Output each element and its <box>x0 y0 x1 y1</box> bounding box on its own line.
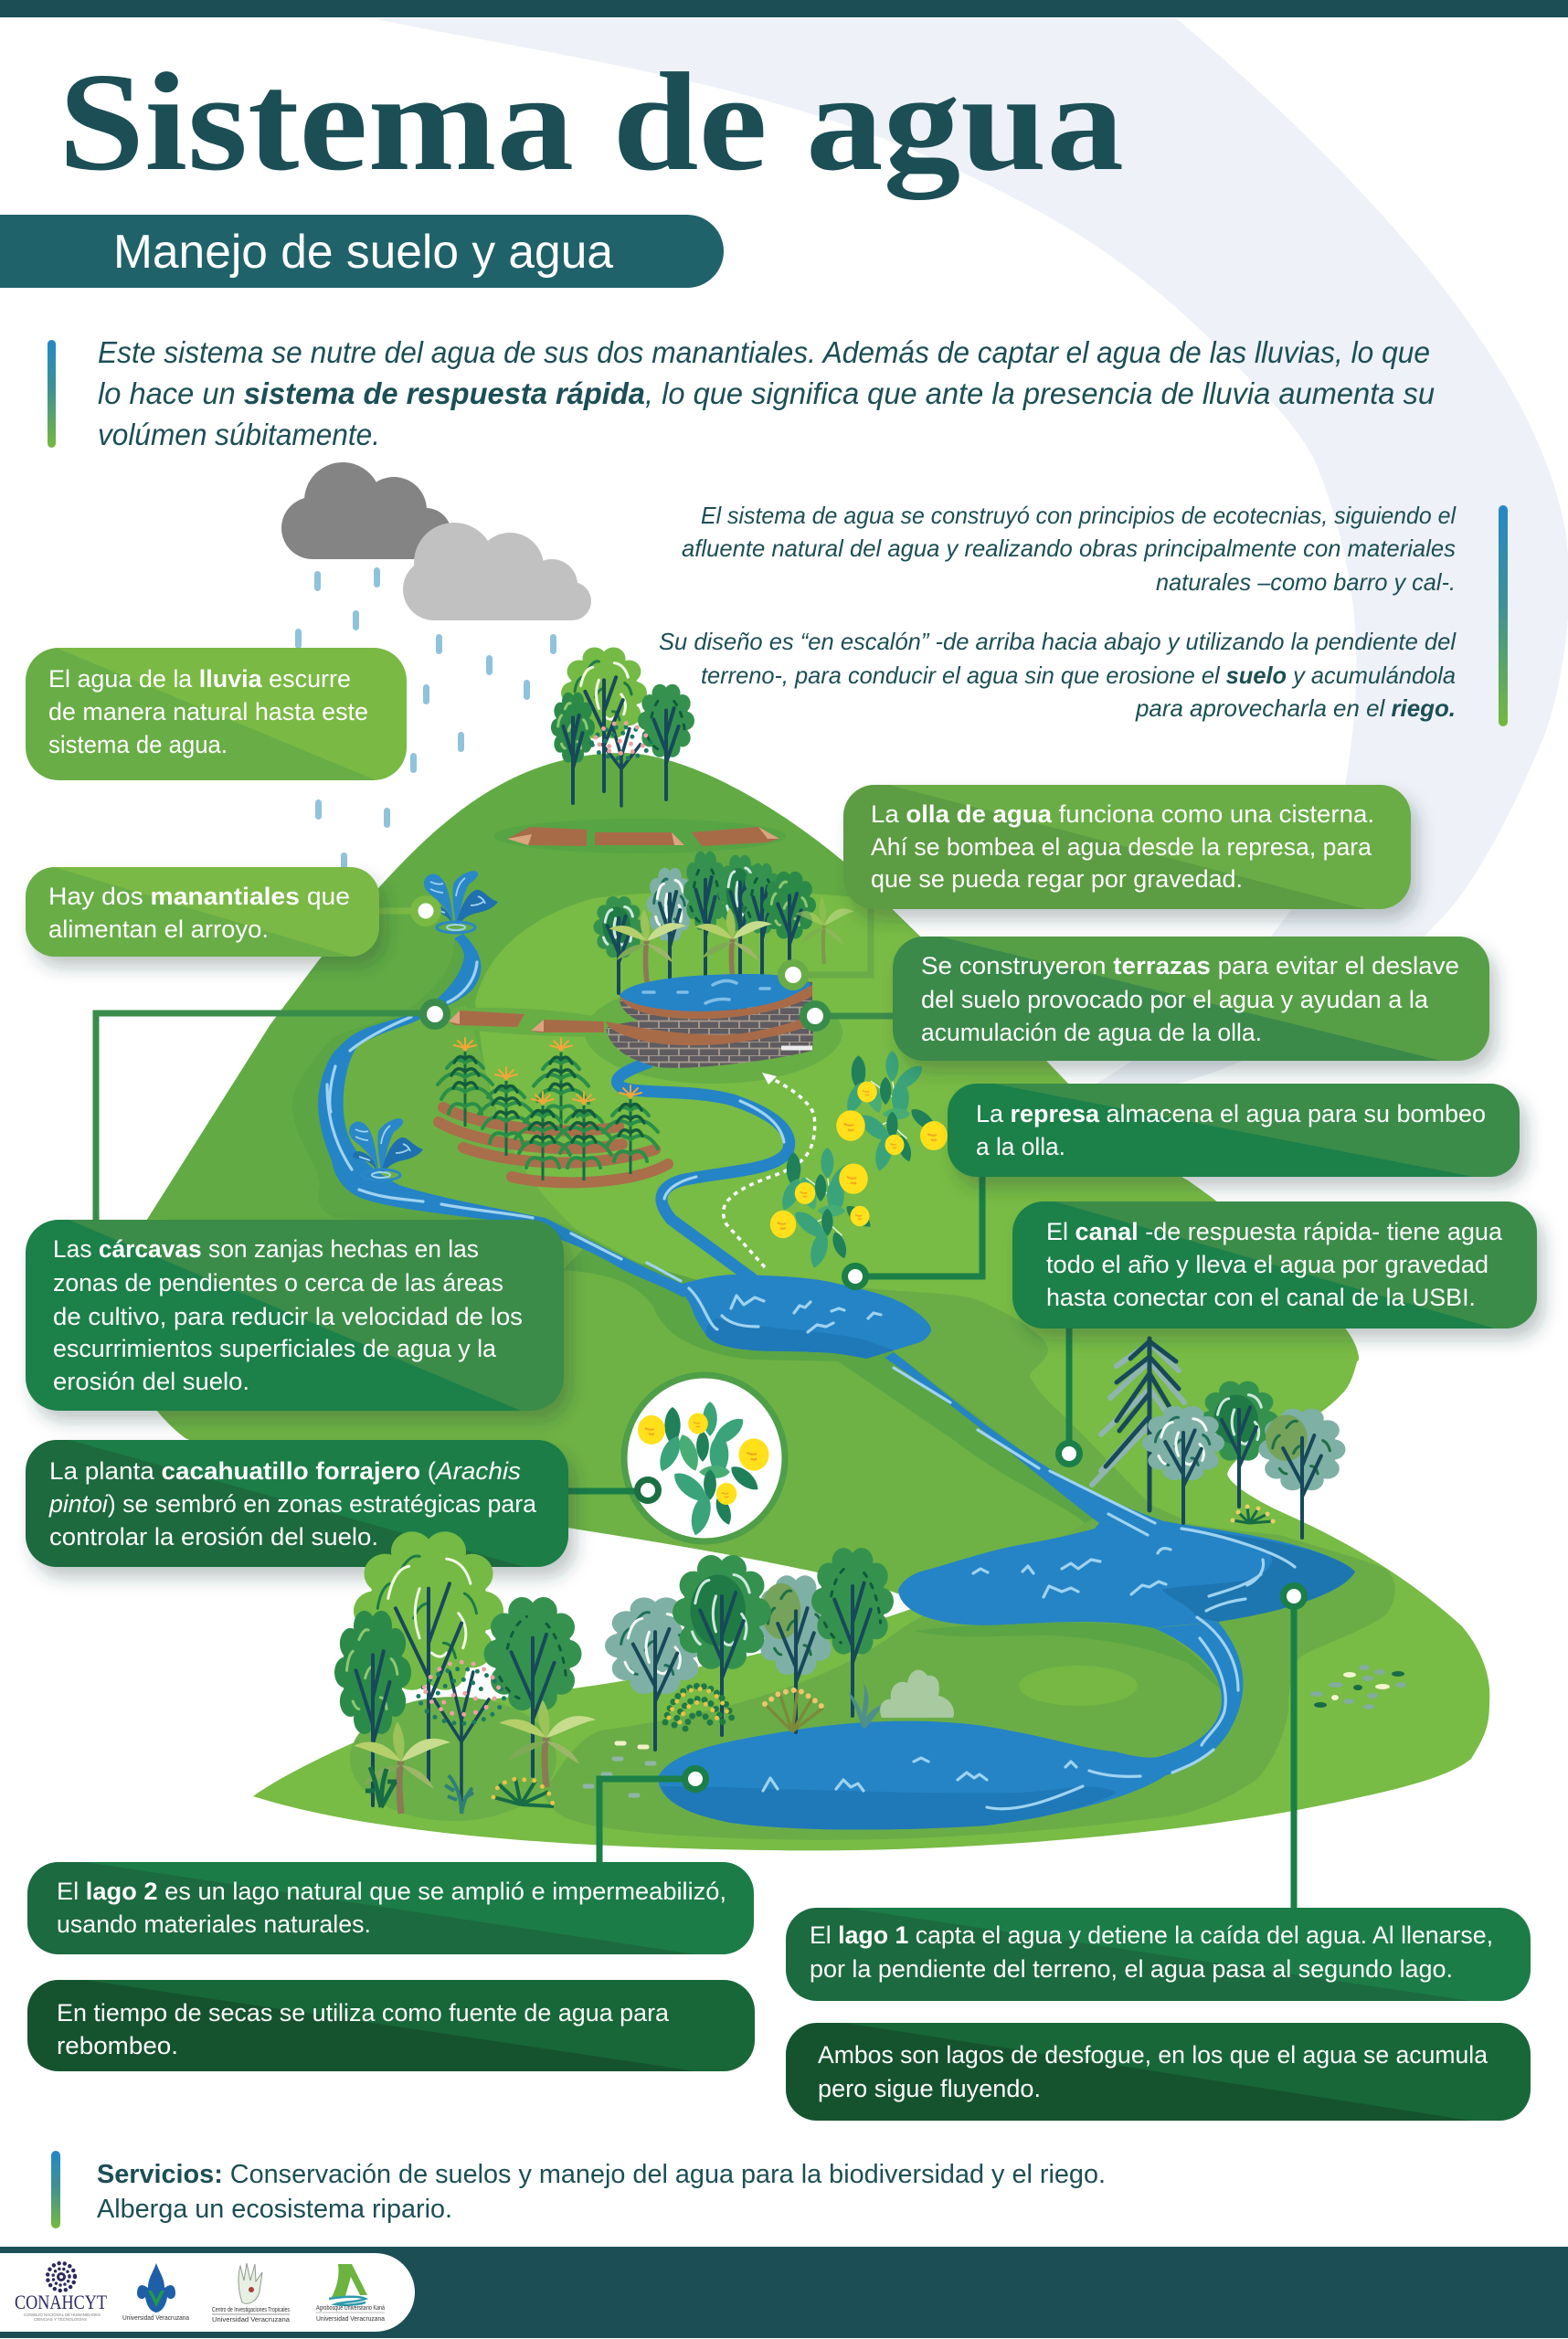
callout: represa: La represa almacena el agua para su bombeo <box>976 1100 1486 1127</box>
callout: lago 2 <box>27 1862 754 1954</box>
services text <box>51 2151 1106 2228</box>
mid green between river and hump <box>343 1005 577 1231</box>
olla de agua pond with stone terraces <box>606 974 814 1068</box>
right explanatory text <box>659 502 1508 726</box>
callout: carcavas: Las cárcavas son zanjas hechas en las <box>53 1235 479 1263</box>
logo: centro de investigaciones tropicales: Centro de Investigaciones Tropicales <box>212 2307 290 2313</box>
upper terrace logs <box>507 827 779 846</box>
logo: universidad veracruzana <box>122 2263 189 2322</box>
callout: cacahuatillo: La planta cacahuatillo forrajero (Arachis <box>49 1457 521 1485</box>
background curved shape <box>372 18 1568 1084</box>
callout: terrazas: acumulación de agua de la olla. <box>921 1019 1262 1046</box>
callout: cacahuatillo: pintoi) se sembró en zonas estratégicas para <box>48 1490 537 1518</box>
callout: lluvia: de manera natural hasta este <box>48 698 368 725</box>
callout: manantiales <box>26 867 379 957</box>
title: Sistema de agua <box>58 45 1124 200</box>
main hill <box>119 753 1359 1594</box>
right side trees <box>1092 1339 1345 1538</box>
small stones right <box>1310 1665 1406 1709</box>
rain drops <box>295 567 556 873</box>
subtitle pill <box>0 215 724 288</box>
connector: olla <box>778 905 871 990</box>
connector: terrazas <box>800 1000 900 1032</box>
callout: lluvia: sistema de agua. <box>48 731 228 758</box>
river to lake 2 <box>1147 1622 1243 1780</box>
right explanatory text: terreno-, para conducir el agua sin que erosione el suelo y acumulándola <box>701 661 1456 689</box>
dark cloud <box>281 462 451 559</box>
pond trees and bananas <box>594 852 853 993</box>
callout: carcavas: escurrimientos superficiales de agua y la <box>53 1335 497 1362</box>
callout: carcavas <box>26 1220 564 1411</box>
logo: conahcyt: CONSEJO NACIONAL DE HUMANIDADES <box>24 2313 101 2317</box>
callout: lago 1 <box>786 1908 1531 2001</box>
springs <box>349 871 498 1180</box>
callout: lago 2: usando materiales naturales. <box>57 1910 371 1938</box>
callout: terrazas: Se construyeron terrazas para evitar el deslave <box>921 952 1459 979</box>
corn terraces <box>439 1107 668 1182</box>
callout: terrazas <box>893 937 1489 1061</box>
logo: centro de investigaciones tropicales <box>212 2263 290 2323</box>
mid green right of river <box>804 1279 1188 1521</box>
pine <box>1092 1339 1184 1510</box>
callout: cacahuatillo <box>26 1440 568 1567</box>
callout: canal: hasta conectar con el canal de la USBI. <box>1046 1284 1476 1311</box>
callout: carcavas: de cultivo, para reducir la velocidad de los <box>53 1303 523 1330</box>
small stones left <box>585 1743 654 1795</box>
callout: ambos: Ambos son lagos de desfogue, en los que el agua se acumula <box>818 2041 1489 2069</box>
lake 2 <box>658 1721 1172 1829</box>
hilltop trees <box>551 647 694 806</box>
intro text block: Este sistema se nutre del agua de sus dos manantiales. Además de captar el agua de las lluvias, lo que <box>98 335 1430 369</box>
logo: agrobosque <box>316 2264 385 2323</box>
footer logos panel <box>0 2253 415 2332</box>
callout: carcavas: zonas de pendientes o cerca de las áreas <box>53 1269 503 1297</box>
logo: agrobosque: Agrobosque Universitario Kaná <box>316 2305 385 2312</box>
intro text block <box>48 335 1435 451</box>
services text: Alberga un ecosistema ripario. <box>97 2195 452 2224</box>
right explanatory text: naturales –como barro y cal-. <box>1156 568 1456 596</box>
middle bottom trees and shrubs <box>605 1548 954 1750</box>
callout: lago 2: El lago 2 es un lago natural que se amplió e impermeabilizó, <box>57 1878 726 1905</box>
lower ground <box>253 1474 1489 1850</box>
subtitle pill: Manejo de suelo y agua <box>113 226 613 279</box>
callout: secas: rebombeo. <box>57 2032 178 2059</box>
callout: manantiales: alimentan el arroyo. <box>48 915 269 943</box>
mid green around lakes <box>544 1498 1395 1840</box>
connector: represa <box>842 1170 982 1290</box>
callout: canal <box>1012 1201 1537 1328</box>
callout: canal: todo el año y lleva el agua por gravedad <box>1046 1251 1489 1278</box>
light cloud <box>403 523 591 620</box>
right explanatory text: El sistema de agua se construyó con principios de ecotecnias, siguiendo el <box>701 502 1457 529</box>
band under lake one <box>914 1623 1222 1690</box>
second terrace logs <box>449 1011 604 1032</box>
connector: manantiales <box>366 895 441 926</box>
callout: terrazas: del suelo provocado por el agua y ayudan a la <box>921 986 1429 1013</box>
callout: olla <box>843 785 1411 909</box>
logo: conahcyt: CONAHCYT <box>15 2291 107 2313</box>
callout: olla: Ahí se bombea el agua desde la represa, para <box>871 833 1372 861</box>
logo: conahcyt: CIENCIAS Y TECNOLOGÍAS <box>34 2316 87 2322</box>
callout: represa <box>948 1084 1520 1177</box>
services text: Servicios: Conservación de suelos y manejo del agua para la biodiversidad y el riego. <box>97 2160 1106 2189</box>
bottom left trees <box>334 1531 596 1814</box>
represa lake <box>675 1275 931 1359</box>
footer bar <box>0 2247 1568 2338</box>
right explanatory text: afluente natural del agua y realizando obras principalmente con materiales <box>682 534 1456 562</box>
peanut plants <box>770 1051 948 1270</box>
river <box>318 934 1355 1829</box>
callout: ambos: pero sigue fluyendo. <box>818 2075 1041 2102</box>
callout: olla: que se pueda regar por gravedad. <box>871 865 1243 893</box>
callout: ambos <box>786 2023 1531 2121</box>
connector: lago 2 <box>599 1765 709 1864</box>
intro text block: volúmen súbitamente. <box>98 418 380 451</box>
right explanatory text: para aprovecharla en el riego. <box>1135 694 1456 722</box>
connector: canal <box>1055 1325 1083 1467</box>
callout: olla: La olla de agua funciona como una cisterna. <box>871 800 1374 828</box>
plant circle inset <box>568 1375 785 1541</box>
area below the river <box>119 1218 1099 1594</box>
right explanatory text: Su diseño es “en escalón” -de arriba hacia abajo y utilizando la pendiente del <box>659 628 1457 655</box>
callout: lluvia: El agua de la lluvia escurre <box>48 665 351 693</box>
corn plants <box>438 1038 658 1180</box>
callout: secas <box>27 1980 755 2071</box>
lake 1 <box>898 1521 1355 1628</box>
dark band below represa and river <box>563 1247 1110 1523</box>
darker band left of upper river <box>291 934 548 1229</box>
callout: lago 1: El lago 1 capta el agua y detiene la caída del agua. Al llenarse, <box>810 1921 1493 1949</box>
callout: cacahuatillo: controlar la erosión del suelo. <box>49 1523 378 1551</box>
connector: lago 1 <box>1280 1582 1308 1910</box>
light hump and right lobe <box>475 891 1359 1526</box>
river highlights and waves <box>327 962 1295 1809</box>
logo: universidad veracruzana: Universidad Veracruzana <box>122 2315 189 2322</box>
callout: canal: El canal -de respuesta rápida- tiene agua <box>1046 1218 1503 1245</box>
callout: carcavas: erosión del suelo. <box>53 1368 249 1395</box>
dotted arrow pump path <box>724 1073 815 1267</box>
callout: lluvia <box>26 648 407 780</box>
hill and ground <box>119 753 1489 1850</box>
logo: conahcyt <box>15 2263 107 2322</box>
logo: centro de investigaciones tropicales: Universidad Veracruzana <box>212 2317 290 2323</box>
callout: manantiales: Hay dos manantiales que <box>48 883 350 910</box>
callout: lago 1: por la pendiente del terreno, el agua pasa al segundo lago. <box>810 1955 1453 1983</box>
intro text block: lo hace un sistema de respuesta rápida, lo que significa que ante la presencia de lluvia aumenta su <box>98 376 1435 410</box>
connector: carcavas <box>96 999 450 1224</box>
callout: secas: En tiempo de secas se utiliza como fuente de agua para <box>57 1999 670 2027</box>
top bar <box>0 0 1568 17</box>
logo: agrobosque: Universidad Veracruzana <box>316 2316 385 2323</box>
callout: represa: a la olla. <box>976 1133 1065 1160</box>
